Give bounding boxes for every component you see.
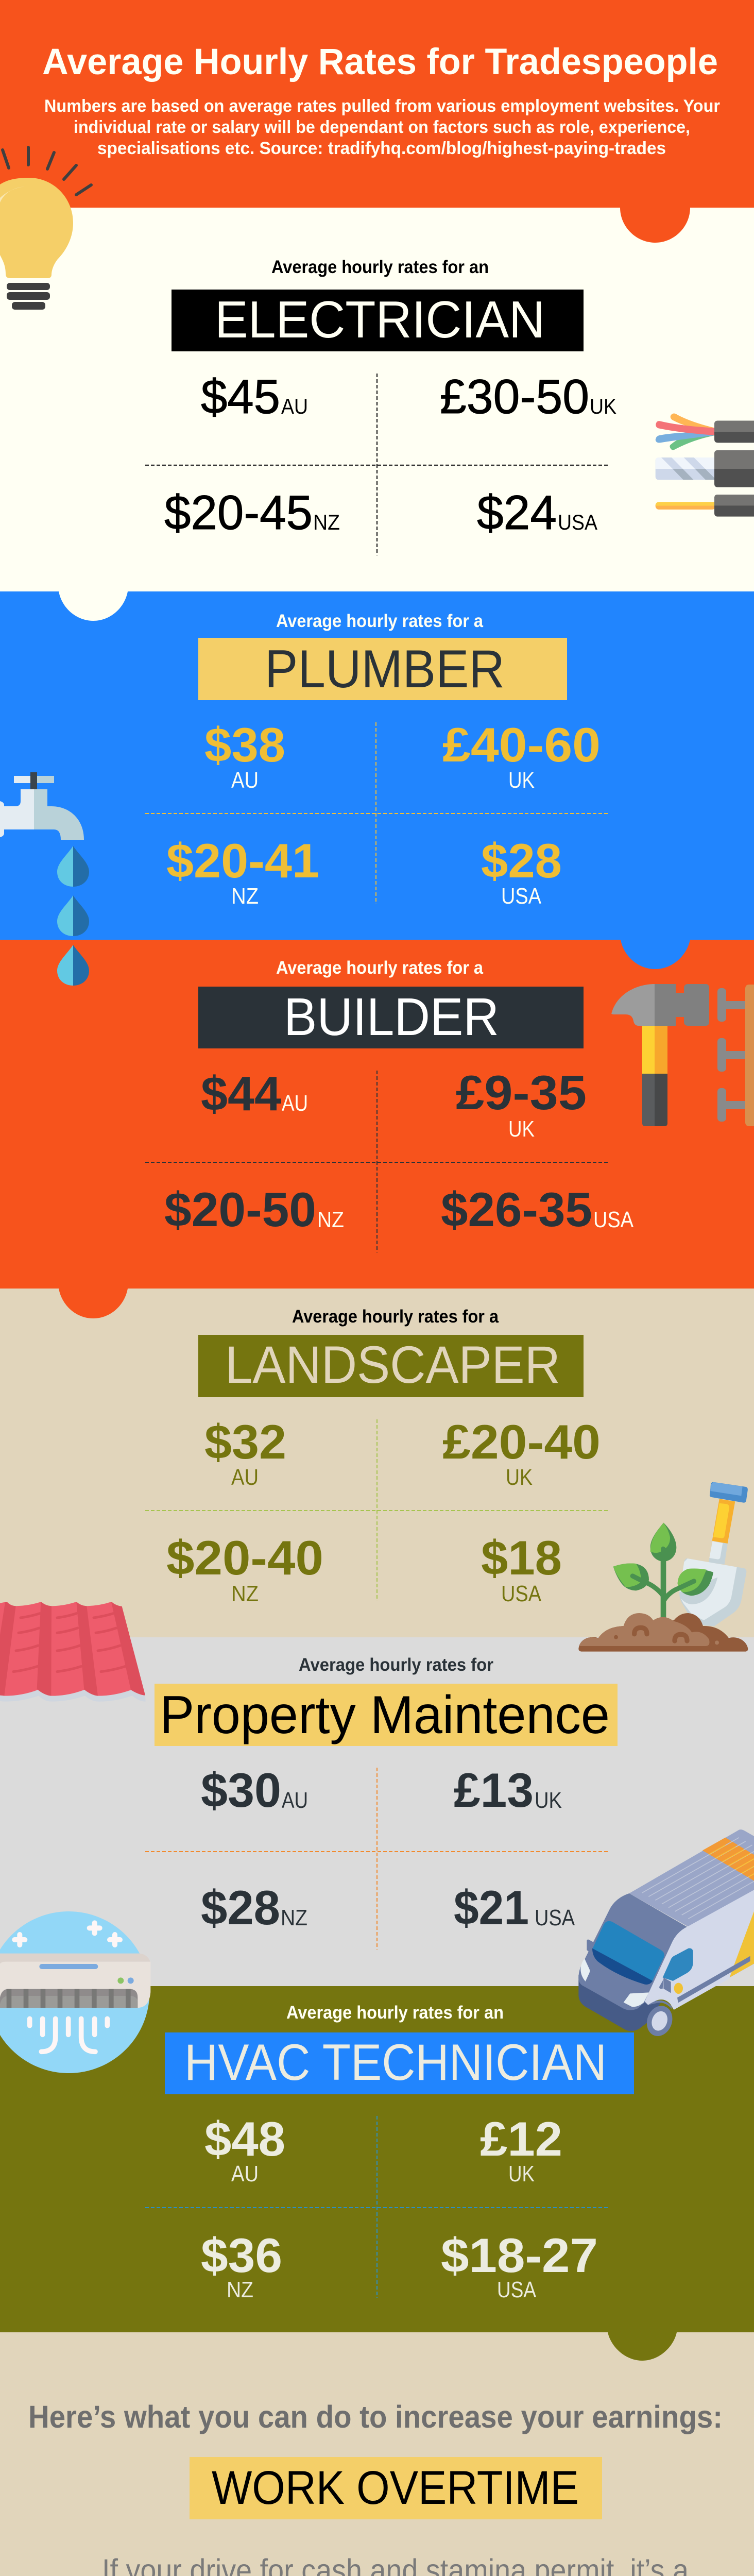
rate: UK: UK [508, 2161, 535, 2187]
rate: USA: USA [497, 2277, 537, 2302]
rate: UK: £30-50 [440, 369, 589, 423]
icon: hammer and nails [611, 984, 754, 1126]
intro text: Numbers are based on average rates pulled from various employment websites. Your [44, 96, 720, 116]
intro label: Average hourly rates for an [286, 2003, 504, 2023]
tab: hvac [608, 2332, 677, 2361]
heading: work overtime: WORK OVERTIME [212, 2462, 579, 2514]
rate: AU: $32 [204, 1415, 286, 1469]
rate: NZ: $20-50 [164, 1182, 316, 1236]
panel: property maintenance [0, 1637, 754, 1986]
rate: NZ: $20-41 [166, 834, 319, 888]
rate: UK: £12 [480, 2112, 562, 2166]
intro text: individual rate or salary will be dependant on factors such as role, experience, [74, 117, 690, 137]
heading: landscaper: LANDSCAPER [225, 1335, 560, 1394]
heading: property maintence: Property Maintence [160, 1685, 610, 1745]
rate: UK: UK [508, 768, 535, 793]
panel: header [0, 0, 754, 208]
icon: plant and shovel [578, 1482, 748, 1652]
rate: USA: $18-27 [441, 2228, 598, 2282]
icon: cables [656, 413, 754, 517]
rate: NZ: $20-45 [164, 485, 313, 539]
panel: plumber [0, 591, 754, 940]
heading: plumber: PLUMBER [265, 639, 505, 699]
heading: builder: BUILDER [284, 987, 499, 1046]
title: Average Hourly Rates for Tradespeople [42, 42, 718, 82]
rate: NZ: NZ [231, 884, 259, 909]
rate: USA: USA [558, 510, 597, 534]
rate: AU: AU [281, 394, 308, 418]
rate: UK: UK [508, 1116, 535, 1142]
rate: AU: AU [282, 1091, 308, 1116]
intro label: Average hourly rates for an [271, 257, 489, 277]
tab: builder [59, 1289, 128, 1318]
rate: NZ: NZ [281, 1905, 307, 1930]
rate: UK: £13 [454, 1763, 534, 1817]
rate: USA: $26-35 [441, 1182, 592, 1236]
rate: NZ [166, 1531, 323, 1606]
rate divider lines [145, 722, 609, 904]
intro label: Average hourly rates for a [276, 958, 483, 978]
rate: AU: AU [231, 2161, 259, 2187]
rate divider lines [145, 1071, 609, 1252]
rate: NZ: $20-40 [166, 1531, 323, 1585]
rate: UK [442, 718, 601, 793]
rate: AU: AU [282, 1788, 308, 1813]
rate: UK: £20-40 [442, 1415, 601, 1469]
panel: landscaper [0, 1289, 754, 1637]
intro label: Average hourly rates for [299, 1655, 493, 1675]
panel: hvac technician [0, 1986, 754, 2332]
tab: header [620, 208, 690, 243]
rate: NZ: NZ [317, 1207, 344, 1232]
rate: USA: USA [501, 884, 542, 909]
intro label: Average hourly rates for a [292, 1307, 499, 1327]
heading: builder [198, 987, 584, 1048]
rate: AU: $38 [204, 718, 285, 772]
icon: light bulb [0, 147, 91, 310]
rate: NZ: NZ [227, 2277, 253, 2302]
rate: USA [441, 2228, 598, 2302]
rate: USA: USA [501, 1581, 542, 1606]
rate: NZ: NZ [313, 510, 340, 534]
heading: electrician: ELECTRICIAN [215, 291, 545, 349]
rate divider lines [145, 1419, 609, 1601]
rate: NZ: NZ [231, 1581, 259, 1606]
rate: USA: $24 [477, 485, 557, 539]
rate: NZ: $28 [201, 1880, 280, 1935]
rate divider lines [145, 374, 609, 555]
intro text [44, 96, 720, 158]
icon: roof [0, 1602, 146, 1702]
heading: plumber [198, 638, 567, 700]
heading: hvac technician: HVAC TECHNICIAN [184, 2033, 607, 2091]
panel: builder [0, 940, 754, 1289]
rate: AU: AU [231, 768, 259, 793]
intro label: Average hourly rates for a [276, 611, 483, 631]
rate: USA [454, 1880, 575, 1935]
rate: AU: $48 [204, 2112, 285, 2166]
rate: AU: $30 [201, 1763, 281, 1817]
rate: UK: UK [506, 1465, 533, 1490]
rate: AU: $44 [201, 1066, 281, 1121]
tab: plumber [621, 940, 690, 969]
rate: USA: $28 [481, 834, 562, 888]
icon: van [578, 1829, 754, 2036]
rate: USA: $21 [454, 1880, 529, 1935]
rate: UK [442, 1415, 601, 1490]
rate: UK: UK [535, 1788, 562, 1813]
icon: water drops [57, 846, 89, 986]
rate: UK: UK [590, 394, 616, 418]
rate: UK: £40-60 [442, 718, 601, 772]
rate: USA [477, 485, 597, 539]
rate: NZ: $36 [201, 2228, 282, 2282]
rate: USA: USA [593, 1207, 634, 1232]
panel: increase your earnings [0, 2332, 754, 2576]
rate: AU: $45 [201, 369, 280, 423]
rate: USA: $18 [481, 1531, 562, 1585]
rate: UK: £9-35 [456, 1065, 587, 1120]
rate divider lines [145, 1768, 609, 1950]
tab: electrician [59, 591, 128, 621]
rate divider lines [145, 2116, 609, 2298]
panel: electrician [0, 208, 754, 591]
rate: UK [456, 1065, 587, 1142]
icon: air conditioner [0, 1911, 150, 2073]
rate: USA: USA [535, 1905, 575, 1930]
intro text: specialisations etc. Source: tradifyhq.com/blog/highest-paying-trades [97, 139, 666, 158]
rate: AU: AU [231, 1465, 259, 1490]
icon: tap [0, 772, 84, 840]
